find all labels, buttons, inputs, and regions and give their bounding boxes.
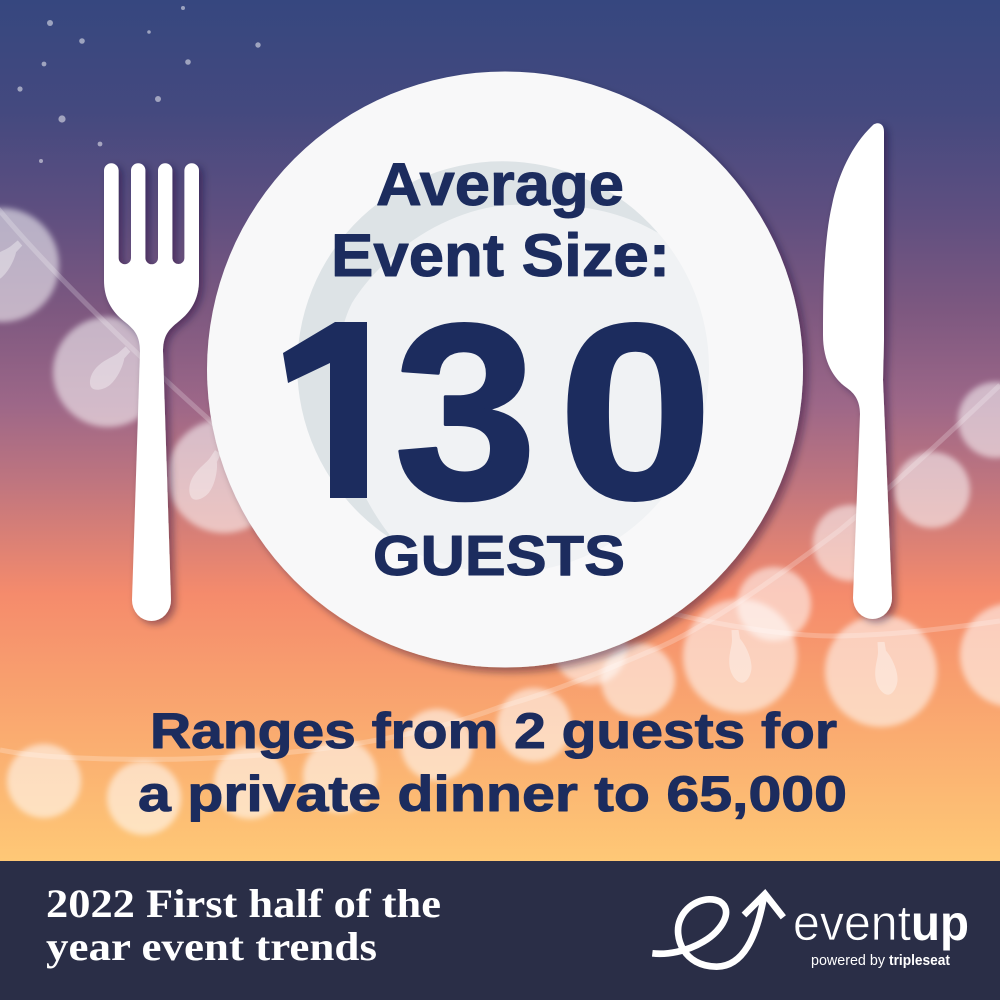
plate well: [299, 163, 709, 573]
wordmark: event: [793, 895, 911, 951]
icon: knife: [823, 123, 892, 619]
footer bar: [0, 861, 1000, 1000]
logo: eventup: [652, 894, 969, 969]
footer title: [46, 881, 441, 969]
big number: 130: 1: [272, 272, 411, 551]
stars: [17, 6, 261, 163]
big number: 130: 3: [394, 272, 537, 551]
icon: looping arrow: [652, 894, 783, 967]
range description: a private dinner to 65,000: [138, 766, 847, 822]
label: guests: GUESTS: [373, 524, 625, 588]
big number: 130: 0: [558, 272, 713, 551]
big number: 130: [283, 322, 704, 502]
heading: Average Event Size: Average: [376, 151, 624, 218]
range description: Ranges from 2 guests for: [150, 703, 837, 759]
footer title: 2022 First half of the: [46, 881, 441, 926]
tagline: powered by: [811, 952, 885, 969]
blurred bulb glows: [0, 208, 1000, 835]
logo: eventup: tripleseat: [889, 952, 950, 969]
range description: [138, 703, 847, 822]
heading: Average Event Size: Event Size:: [331, 222, 670, 289]
bulb shapes: [0, 237, 898, 695]
light strings: [0, 205, 1000, 759]
string lights: [0, 205, 1000, 835]
footer title: year event trends: [46, 924, 377, 969]
logo: eventup: up: [911, 895, 969, 951]
plate rim: [207, 72, 803, 668]
icon: fork: [104, 163, 199, 621]
heading: Average Event Size: [331, 151, 670, 289]
plate well crescent shading: [297, 161, 658, 541]
plate: [207, 72, 803, 668]
